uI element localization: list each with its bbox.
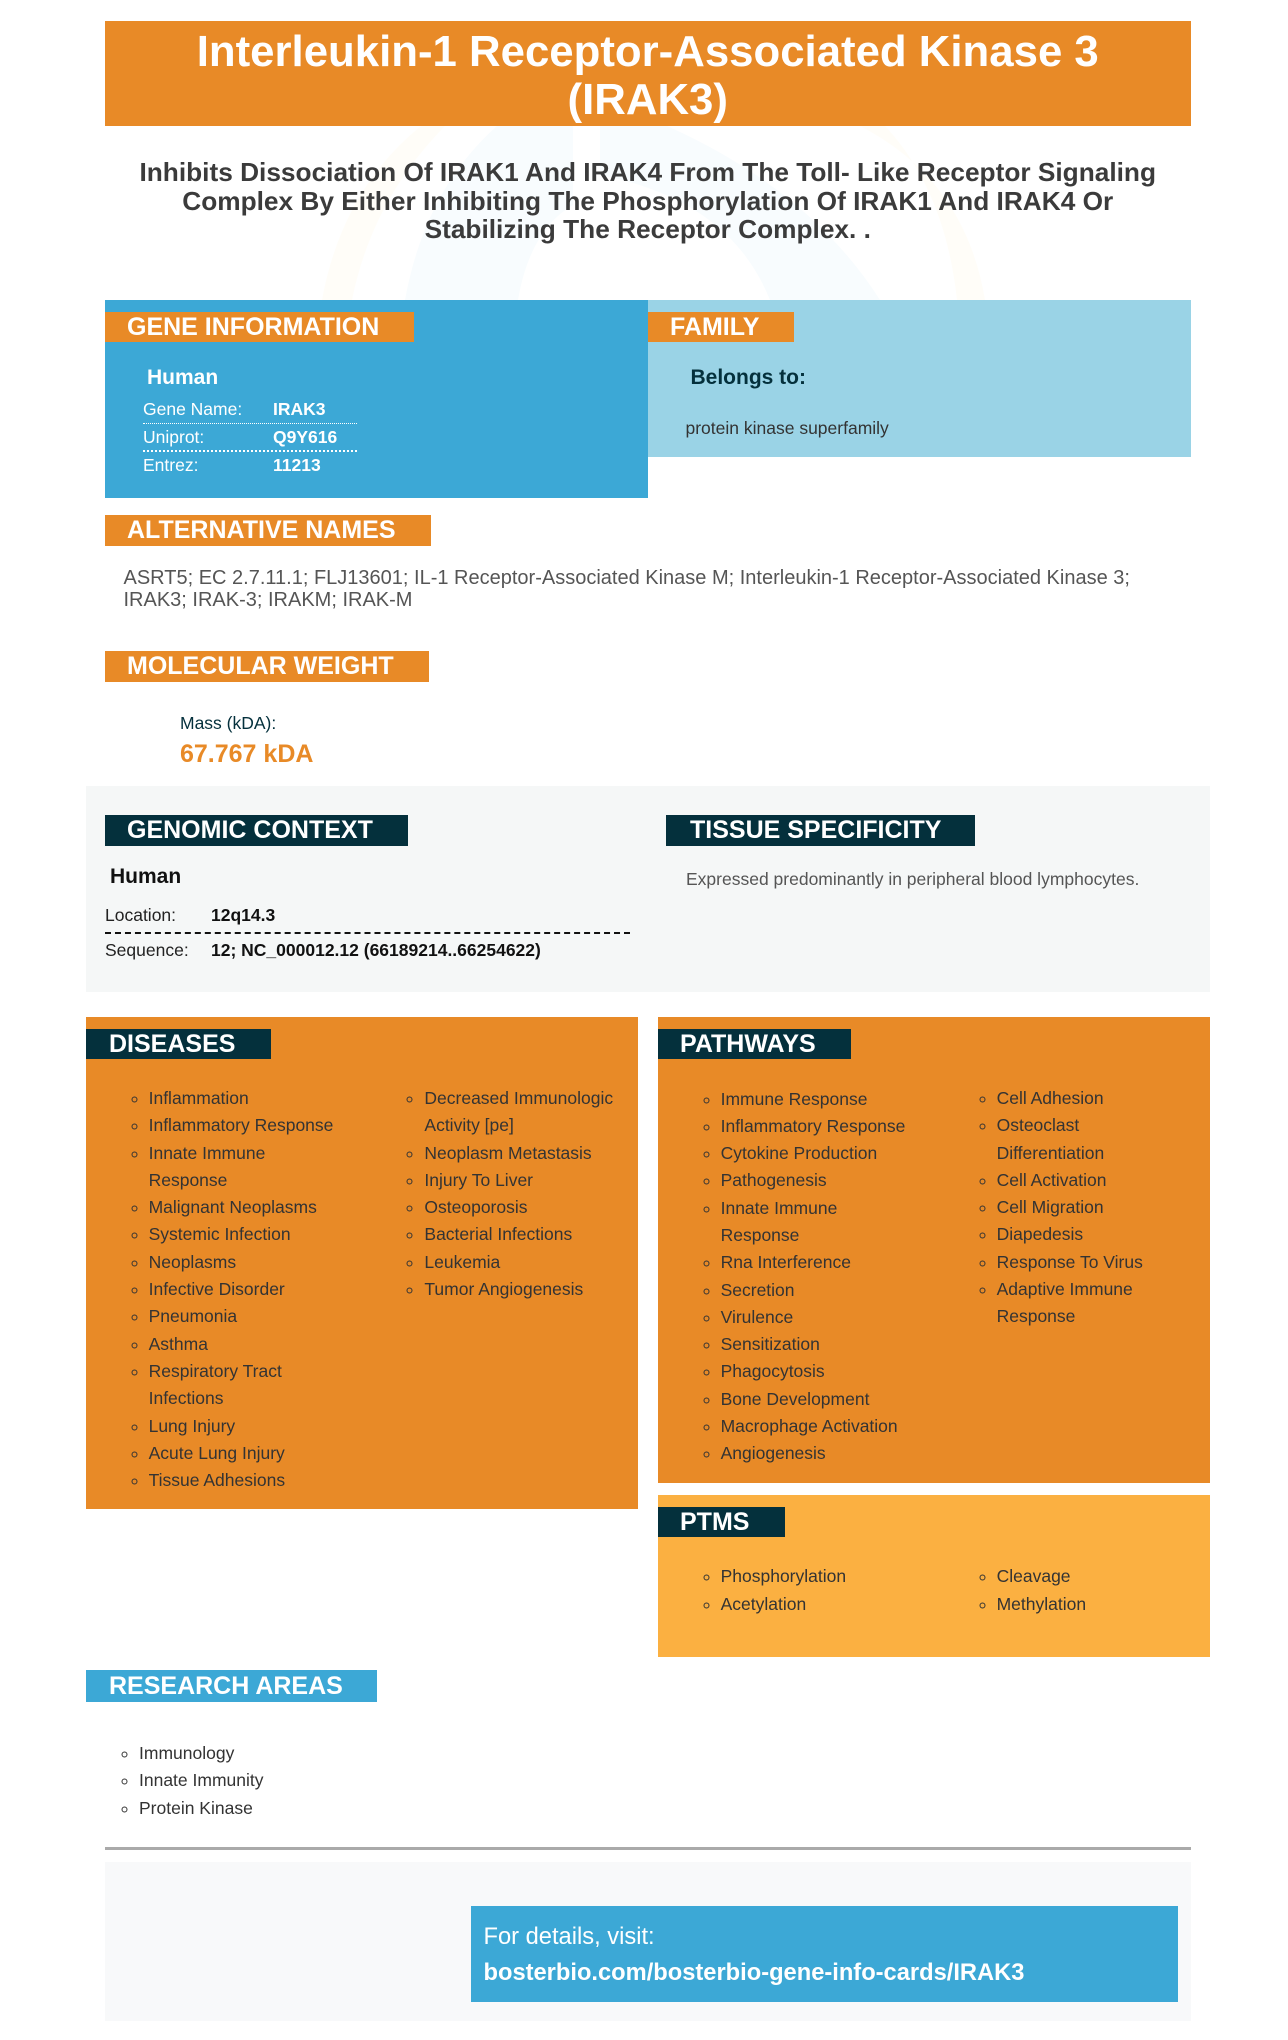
entrez row: Entrez: xyxy=(143,455,198,475)
panel: family xyxy=(648,300,1190,457)
panel: diseases xyxy=(86,1017,638,1509)
gene name row: Gene Name: xyxy=(143,399,242,419)
alternative names text: ASRT5; EC 2.7.11.1; FLJ13601; IL-1 Receptor-Associated Kinase M; Interleukin-1 Receptor-Associated Kinase 3; xyxy=(124,567,1130,589)
label: human: Human xyxy=(147,366,218,389)
mass value: 67.767 kDA xyxy=(180,740,313,768)
pathways list column 1: Response xyxy=(721,1225,799,1245)
diseases list column 1: Response xyxy=(149,1170,227,1190)
subtitle description: Inhibits Dissociation Of IRAK1 And IRAK4 From The Toll- Like Receptor Signaling xyxy=(139,157,1156,187)
diseases list column 1: Inflammatory Response xyxy=(149,1115,333,1135)
mass label: Mass (kDA): xyxy=(180,713,276,733)
research areas list: Immunology xyxy=(139,1743,234,1763)
gene name row xyxy=(143,399,326,419)
research areas list xyxy=(122,1743,264,1818)
panel: gene information xyxy=(105,300,648,498)
research areas list: Innate Immunity xyxy=(139,1770,264,1790)
heading: tissue specificity: TISSUE SPECIFICITY xyxy=(690,816,941,844)
ptms list column 1: Acetylation xyxy=(721,1594,806,1614)
title banner xyxy=(105,21,1190,126)
heading: ptms xyxy=(658,1507,784,1537)
diseases list column 1: Inflammation xyxy=(149,1088,249,1108)
label: human: Human xyxy=(110,865,181,888)
research areas list: Protein Kinase xyxy=(139,1798,253,1818)
heading: genomic context: GENOMIC CONTEXT xyxy=(127,816,373,844)
sequence row xyxy=(105,940,541,960)
pathways list column 1: Bone Development xyxy=(721,1389,869,1409)
ptms list column 1 xyxy=(704,1566,846,1614)
pathways list column 2 xyxy=(980,1088,1143,1326)
dashed divider xyxy=(105,932,630,934)
pathways list column 1: Phagocytosis xyxy=(721,1361,825,1381)
pathways list column 1: Inflammatory Response xyxy=(721,1116,905,1136)
pathways list column 2: Cell Adhesion xyxy=(997,1088,1104,1108)
pathways list column 2: Cell Migration xyxy=(997,1197,1104,1217)
diseases list column 2: Bacterial Infections xyxy=(424,1224,572,1244)
diseases list column 2: Neoplasm Metastasis xyxy=(424,1143,592,1163)
gene name row: IRAK3 xyxy=(273,399,326,419)
subtitle description: Complex By Either Inhibiting The Phosphorylation Of IRAK1 And IRAK4 Or xyxy=(182,186,1113,216)
diseases list column 1: Lung Injury xyxy=(149,1416,235,1436)
pathways list column 2: Osteoclast xyxy=(997,1115,1079,1135)
panel: pathways xyxy=(658,1017,1210,1483)
pathways list column 1: Rna Interference xyxy=(721,1252,851,1272)
diseases list column 2: Leukemia xyxy=(424,1252,500,1272)
heading: ptms: PTMS xyxy=(680,1508,749,1536)
heading: pathways xyxy=(658,1029,851,1059)
sequence row: Sequence: xyxy=(105,940,189,960)
pathways list column 1: Sensitization xyxy=(721,1334,820,1354)
pathways list column 1: Immune Response xyxy=(721,1088,867,1108)
pathways list column 1: Angiogenesis xyxy=(721,1443,826,1463)
diseases list column 1: Infections xyxy=(149,1388,224,1408)
ptms list column 1: Phosphorylation xyxy=(721,1566,846,1586)
panel: ptms xyxy=(658,1495,1210,1657)
ptms list column 2: Cleavage xyxy=(997,1566,1071,1586)
ptms list column 2 xyxy=(980,1566,1086,1614)
panel: genomic context and tissue specificity: 12q14.3 xyxy=(211,905,275,925)
heading: molecular weight: MOLECULAR WEIGHT xyxy=(127,652,394,680)
tissue text: Expressed predominantly in peripheral blood lymphocytes. xyxy=(686,869,1139,889)
heading: alternative names: ALTERNATIVE NAMES xyxy=(127,516,396,544)
entrez row: 11213 xyxy=(273,455,321,475)
pathways list column 2: Diapedesis xyxy=(997,1224,1083,1244)
pathways list column 1: Cytokine Production xyxy=(721,1143,877,1163)
pathways list column 1: Pathogenesis xyxy=(721,1170,827,1190)
ptms list column 2: Methylation xyxy=(997,1594,1086,1614)
pathways list column 2: Adaptive Immune xyxy=(997,1279,1133,1299)
panel: genomic context and tissue specificity: 12; NC_000012.12 (66189214..66254622) xyxy=(211,940,541,960)
diseases list column 2: Decreased Immunologic xyxy=(424,1088,613,1108)
title banner: Interleukin-1 Receptor-Associated Kinase 3 xyxy=(197,27,1099,76)
diseases list column 1: Neoplasms xyxy=(149,1252,236,1272)
heading: family xyxy=(648,312,794,342)
diseases list column 2: Activity [pe] xyxy=(424,1115,514,1135)
label: belongs to: Belongs to: xyxy=(690,366,806,389)
diseases list column 1: Pneumonia xyxy=(149,1306,237,1326)
heading: family: FAMILY xyxy=(670,313,759,341)
pathways list column 2: Response xyxy=(997,1306,1075,1326)
diseases list column 2: Osteoporosis xyxy=(424,1197,528,1217)
pathways list column 2: Cell Activation xyxy=(997,1170,1107,1190)
diseases list column 1: Systemic Infection xyxy=(149,1224,291,1244)
background watermark xyxy=(0,126,1288,300)
diseases list column 1: Tissue Adhesions xyxy=(149,1470,285,1490)
uniprot row xyxy=(143,423,357,450)
callout: details link xyxy=(471,1906,1178,2002)
diseases list column 1: Respiratory Tract xyxy=(149,1361,282,1381)
diseases list column 2 xyxy=(406,1088,613,1299)
pathways list column 1: Secretion xyxy=(721,1280,795,1300)
uniprot row: Q9Y616 xyxy=(273,427,337,447)
subtitle description xyxy=(139,157,1156,244)
family value: protein kinase superfamily xyxy=(686,418,889,438)
diseases list column 1: Asthma xyxy=(149,1334,208,1354)
subtitle description: Stabilizing The Receptor Complex. . xyxy=(425,214,871,244)
pathways list column 2: Differentiation xyxy=(997,1143,1104,1163)
uniprot row: Uniprot: xyxy=(143,427,204,447)
location row: Location: xyxy=(105,905,176,925)
diseases list column 1: Acute Lung Injury xyxy=(149,1443,285,1463)
panel: footer xyxy=(105,1862,1190,2021)
diseases list column 1: Infective Disorder xyxy=(149,1279,285,1299)
diseases list column 1: Malignant Neoplasms xyxy=(149,1197,317,1217)
alternative names text xyxy=(124,567,1130,611)
heading: gene information: GENE INFORMATION xyxy=(127,313,379,341)
alternative names text: IRAK3; IRAK-3; IRAKM; IRAK-M xyxy=(124,589,412,611)
diseases list column 1 xyxy=(132,1088,333,1490)
panel: genomic context and tissue specificity xyxy=(86,786,1210,992)
diseases list column 2: Injury To Liver xyxy=(424,1170,533,1190)
diseases list column 1: Innate Immune xyxy=(149,1143,265,1163)
location row xyxy=(105,905,275,925)
entrez row xyxy=(143,450,357,478)
pathways list column 2: Response To Virus xyxy=(997,1252,1143,1272)
details url: bosterbio.com/bosterbio-gene-info-cards/IRAK3 xyxy=(484,1960,1024,1986)
title banner: (IRAK3) xyxy=(568,75,728,124)
diseases list column 2: Tumor Angiogenesis xyxy=(424,1279,583,1299)
details label: For details, visit: xyxy=(484,1924,655,1950)
footer rule xyxy=(105,1847,1190,1850)
pathways list column 1: Macrophage Activation xyxy=(721,1416,898,1436)
heading: research areas: RESEARCH AREAS xyxy=(109,1672,343,1700)
pathways list column 1: Virulence xyxy=(721,1307,793,1327)
heading: diseases: DISEASES xyxy=(109,1030,235,1058)
heading: pathways: PATHWAYS xyxy=(680,1030,816,1058)
heading: diseases xyxy=(86,1029,271,1059)
pathways list column 1: Innate Immune xyxy=(721,1198,837,1218)
pathways list column 1 xyxy=(704,1088,905,1463)
